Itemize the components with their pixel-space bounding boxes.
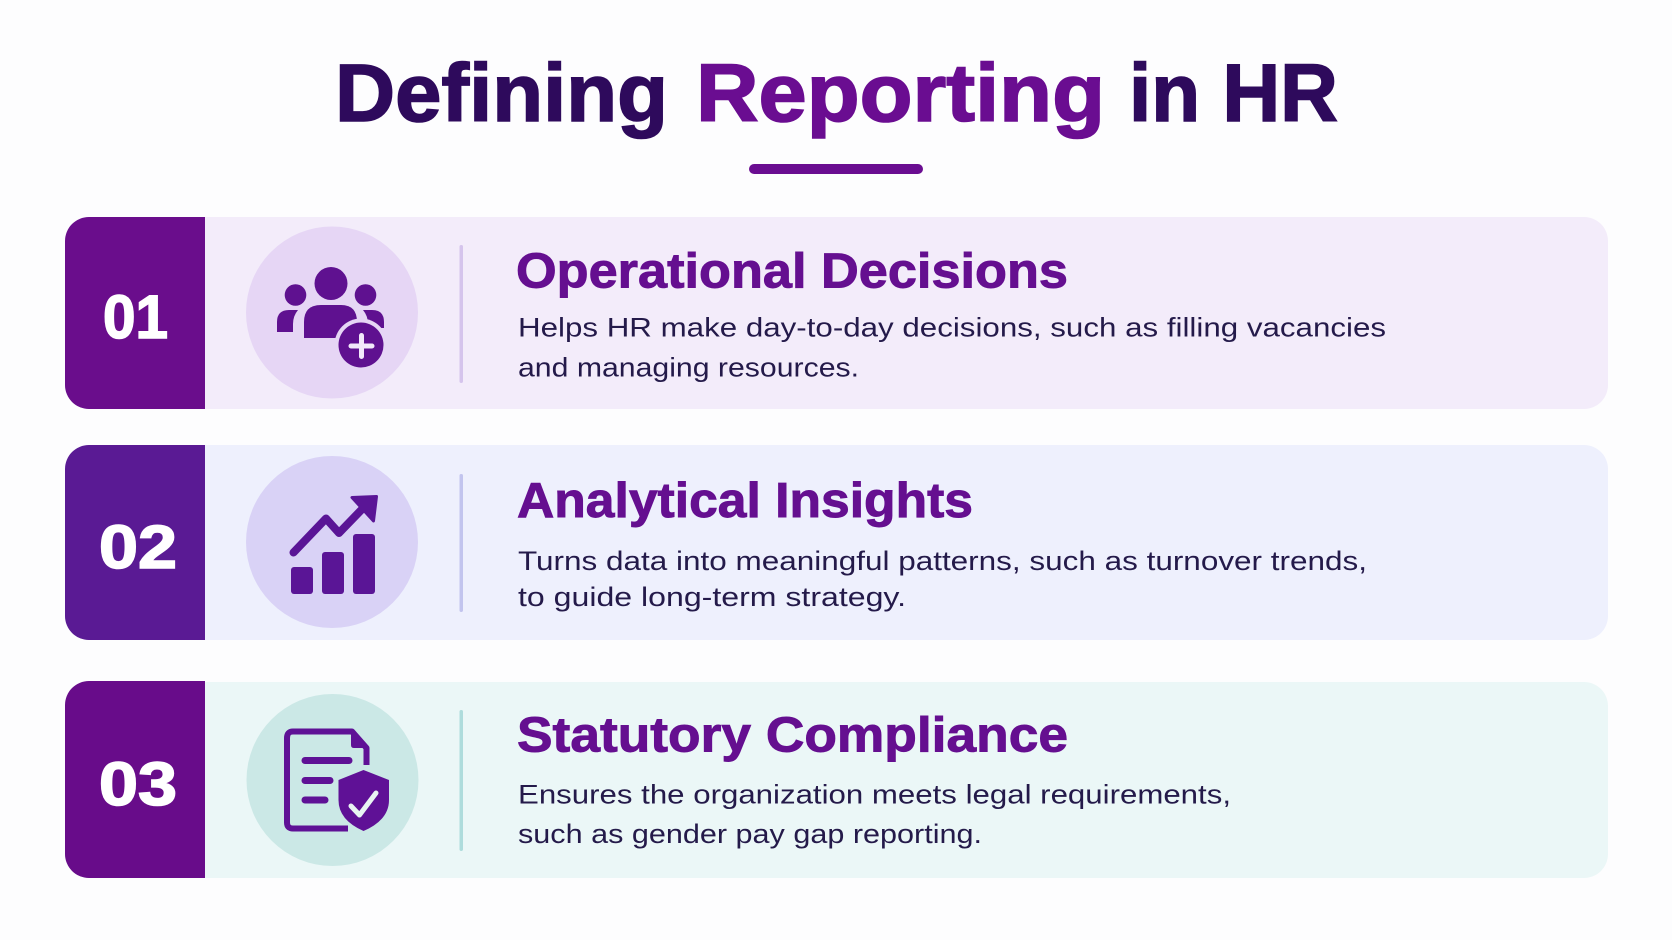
body text: statutory compliance: such as gender pay gap reporting. [518,819,982,849]
heading: analytical insights: Analytical Insights [517,474,973,528]
body text: operational decisions: Helps HR make day-to-day decisions, such as filling vacancies [518,312,1386,342]
number badge 02 [65,445,205,640]
body text: operational decisions: and managing resources. [518,352,859,382]
title: in HR [1129,48,1338,139]
title underline [749,164,923,174]
panel: analytical insights [65,445,1608,640]
body text: operational decisions [518,312,1386,382]
number badge 01: 01 [103,283,168,351]
body text: statutory compliance [518,780,1231,849]
title: Reporting [696,48,1105,139]
heading: statutory compliance: Statutory Compliance [517,708,1068,762]
title [335,48,1338,139]
body text: statutory compliance: Ensures the organization meets legal requirements, [518,780,1231,810]
body text: analytical insights: to guide long-term strategy. [518,582,906,612]
panel: operational decisions [65,217,1608,409]
icon: rising bar chart [246,456,418,628]
panel: statutory compliance [65,681,1608,878]
icon: document with shield [246,694,418,866]
body text: analytical insights [518,546,1367,612]
number badge 03: 03 [99,750,177,818]
icon: team with plus [246,226,418,398]
number badge 01 [65,217,205,409]
number badge 03 [65,681,205,878]
number badge 02: 02 [99,513,177,581]
title: Defining [335,48,668,139]
body text: analytical insights: Turns data into meaningful patterns, such as turnover trends, [518,546,1367,576]
heading: operational decisions: Operational Decisions [516,244,1068,298]
